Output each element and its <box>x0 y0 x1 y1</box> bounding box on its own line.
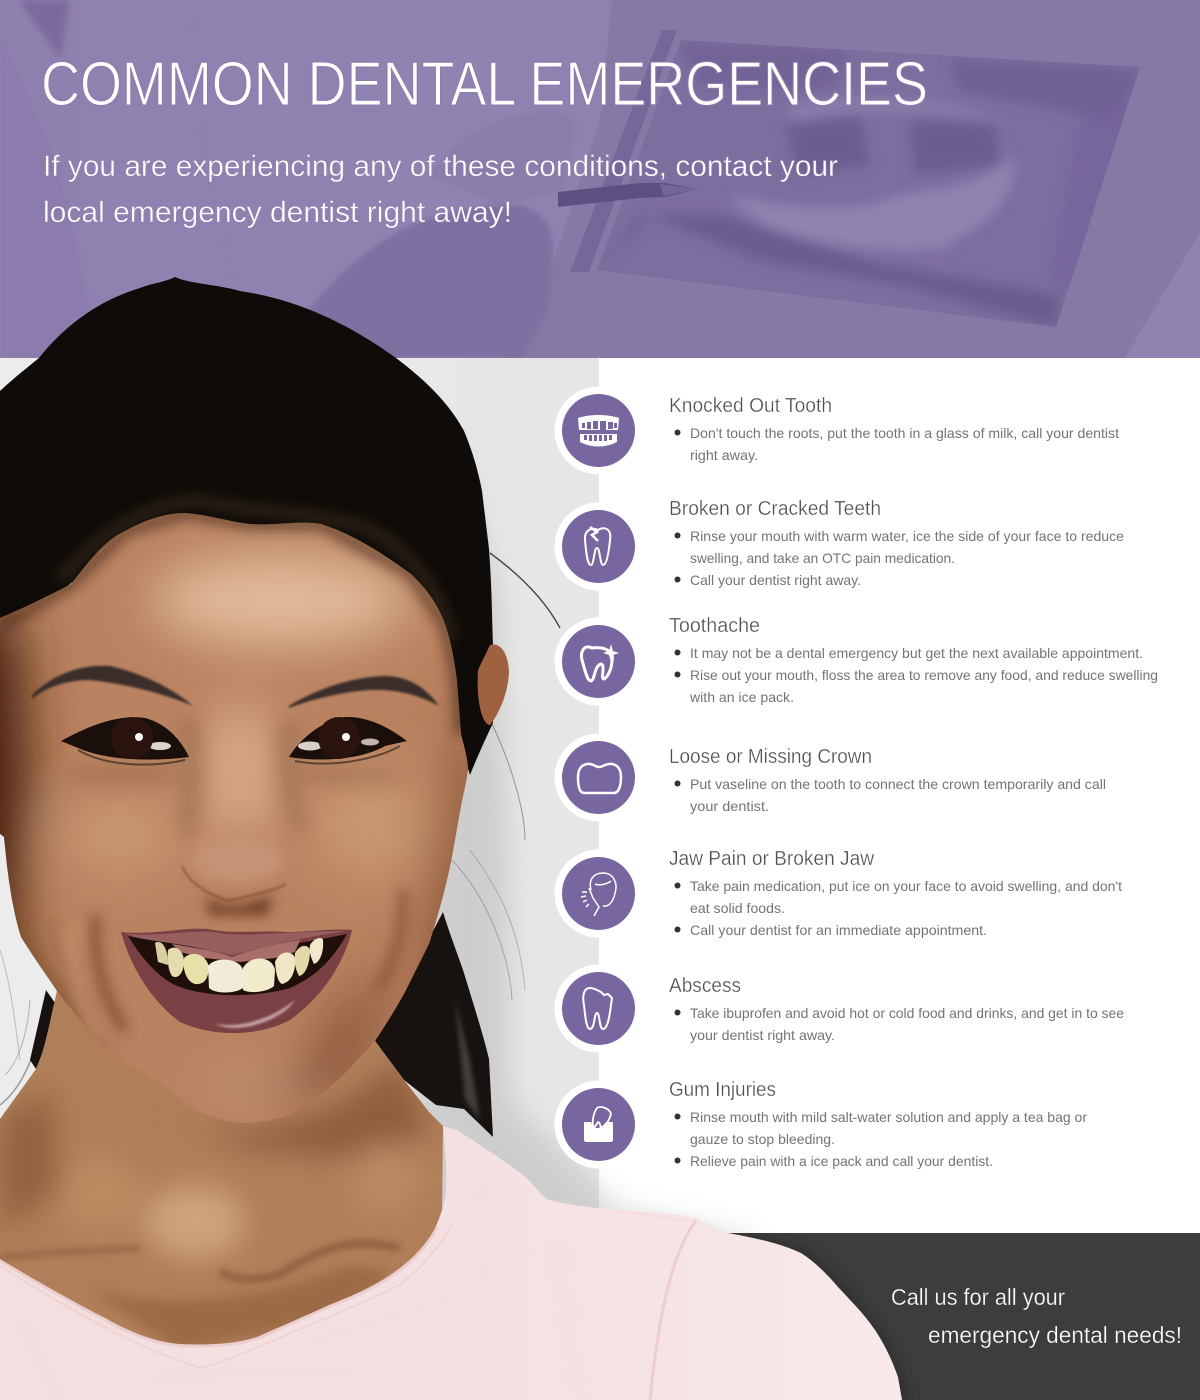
photo: smiling woman <box>0 277 915 1400</box>
footer call to action: Call us for all your <box>891 1284 1065 1310</box>
gum line <box>172 940 300 962</box>
photo: hand with pen <box>310 183 698 358</box>
teeth <box>155 938 323 992</box>
section: Toothache: Rise out your mouth, floss the area to remove any food, and reduce swelling <box>690 667 1158 683</box>
smile crease shading <box>71 890 403 1035</box>
title: COMMON DENTAL EMERGENCIES <box>41 50 928 119</box>
section: Broken or Cracked Teeth: swelling, and take an OTC pain medication. <box>690 550 955 566</box>
panel: grey photo backdrop <box>0 358 599 1233</box>
section: Broken or Cracked Teeth: Rinse your mouth with warm water, ice the side of your face to reduce <box>690 528 1124 544</box>
panel: header photo banner <box>0 0 1200 358</box>
section: Gum Injuries: gauze to stop bleeding. <box>690 1131 835 1147</box>
shadow on footer <box>730 1233 908 1398</box>
section: Abscess: your dentist right away. <box>690 1027 835 1043</box>
icon: cracked tooth <box>554 502 642 590</box>
section: Gum Injuries: Gum Injuries <box>669 1079 776 1101</box>
hair back <box>0 277 493 775</box>
stray hairs <box>0 553 560 1105</box>
section: Gum Injuries <box>669 1079 1087 1169</box>
section: Loose or Missing Crown: Loose or Missing Crown <box>669 746 872 768</box>
hairline soft edge <box>0 513 461 734</box>
section: Knocked Out Tooth: Knocked Out Tooth <box>669 395 832 417</box>
neck shading <box>0 1060 430 1350</box>
hairline warm edge <box>60 500 452 640</box>
section: Loose or Missing Crown <box>669 746 1106 814</box>
shirt fabric streaks <box>20 1180 580 1400</box>
panel: dark footer band <box>560 1233 1200 1400</box>
subtitle: If you are experiencing any of these conditions, contact your <box>43 150 838 183</box>
nose <box>182 836 286 915</box>
subtitle <box>43 150 838 229</box>
lash shadows <box>78 746 400 765</box>
lips <box>121 929 352 1033</box>
section: Toothache: It may not be a dental emergency but get the next available appointment. <box>690 645 1143 661</box>
list: timeline icons <box>554 386 642 1168</box>
section: Loose or Missing Crown: Put vaseline on the tooth to connect the crown temporarily and call <box>690 776 1106 792</box>
section: Gum Injuries: Relieve pain with a ice pack and call your dentist. <box>690 1153 993 1169</box>
photo: x-ray sheet <box>500 0 1200 358</box>
icon: gum injury <box>554 1080 642 1168</box>
section: Gum Injuries: Rinse mouth with mild salt-water solution and apply a tea bag or <box>690 1109 1087 1125</box>
section: Jaw Pain or Broken Jaw: Jaw Pain or Broken Jaw <box>669 848 875 870</box>
photo: ruler strip <box>570 30 677 272</box>
section: Abscess: Abscess <box>669 975 741 997</box>
section: Loose or Missing Crown: your dentist. <box>690 798 769 814</box>
hair tail <box>30 912 493 1137</box>
section: Jaw Pain or Broken Jaw: Take pain medication, put ice on your face to avoid swelling, and don't <box>690 878 1122 894</box>
section: Knocked Out Tooth <box>669 395 1119 463</box>
icon: toothache <box>554 618 642 706</box>
mouth interior <box>128 934 347 995</box>
eyes <box>61 717 407 765</box>
section: Broken or Cracked Teeth <box>669 498 1124 588</box>
icon: crown <box>554 734 642 822</box>
eyebrows <box>32 666 439 708</box>
section: Jaw Pain or Broken Jaw <box>669 848 1122 938</box>
section: Jaw Pain or Broken Jaw: eat solid foods. <box>690 900 785 916</box>
section: Abscess: Take ibuprofen and avoid hot or cold food and drinks, and get in to see <box>690 1005 1124 1021</box>
section: Knocked Out Tooth: Don't touch the roots, put the tooth in a glass of milk, call your dentist <box>690 425 1119 441</box>
soft shadows behind figure <box>406 528 746 1233</box>
face <box>0 513 468 1123</box>
footer call to action: emergency dental needs! <box>928 1322 1182 1348</box>
panel: white content background <box>0 358 1200 1233</box>
ear <box>478 644 509 725</box>
section: Toothache: with an ice pack. <box>689 689 794 705</box>
subtitle: local emergency dentist right away! <box>43 196 512 229</box>
section: Broken or Cracked Teeth: Broken or Cracked Teeth <box>669 498 881 520</box>
collar edge <box>0 1226 436 1344</box>
photo: coat shading <box>22 0 70 56</box>
eye socket shading <box>76 716 392 836</box>
neck <box>0 991 443 1400</box>
icon: knocked out tooth <box>554 386 642 474</box>
icon: abscess tooth <box>554 964 642 1052</box>
section: Toothache <box>669 615 1158 705</box>
icon: jaw pain <box>554 850 642 938</box>
sleeve seam <box>650 1220 696 1400</box>
section: Toothache: Toothache <box>669 615 760 637</box>
footer call to action <box>891 1284 1182 1348</box>
section: Jaw Pain or Broken Jaw: Call your dentist for an immediate appointment. <box>690 922 987 938</box>
shirt <box>0 1120 910 1400</box>
section: Broken or Cracked Teeth: Call your dentist right away. <box>690 572 861 588</box>
section: Knocked Out Tooth: right away. <box>690 447 758 463</box>
section: Abscess <box>669 975 1124 1043</box>
